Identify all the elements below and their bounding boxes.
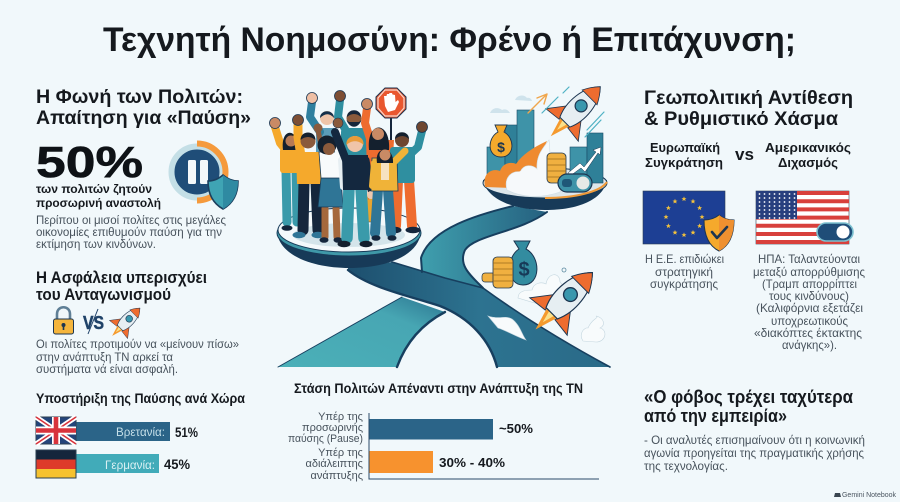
heading: geopolitics: Γεωπολιτική Αντίθεση: [644, 87, 853, 109]
icon: pause donut with shield: [172, 144, 238, 209]
heading: citizens' voice: [36, 86, 251, 129]
quote paragraph: [644, 433, 865, 473]
bar: Britain: Βρετανία:: [116, 425, 165, 439]
right bars: [568, 133, 603, 183]
paragraph: stay behind: [36, 337, 239, 376]
value: continuous: 30% - 40%: [439, 455, 505, 470]
quote paragraph: αγωνία προηγείται της πραγματικής χρήσης: [644, 446, 864, 460]
panel: citizens' voice: [36, 86, 251, 251]
text: EU: συγκράτησης: [650, 277, 718, 291]
panel: support by country: [36, 390, 245, 478]
bar: continuous development: [369, 451, 433, 473]
bar: pause: [369, 419, 493, 440]
subheading: Europe: Συγκράτηση: [645, 155, 723, 170]
bar: Germany: [76, 454, 190, 473]
lower clouds: [488, 275, 605, 342]
illustration: left platform: [277, 208, 421, 268]
vs label: vs: [735, 145, 754, 164]
quote heading: από την εμπειρία»: [644, 406, 787, 426]
paragraph: stay behind: στην ανάπτυξη ΤΝ αρκεί τα: [36, 350, 173, 364]
text: EU: [645, 252, 724, 291]
coins stack: [547, 153, 566, 183]
illustration: acceleration platform: [483, 71, 616, 210]
subheading: Europe: [645, 140, 723, 170]
stat caption: των πολιτών ζητούν: [36, 182, 152, 196]
toggle: [558, 174, 592, 192]
heading: safety: του Ανταγωνισμού: [36, 286, 171, 304]
heading: citizens' voice: Η Φωνή των Πολιτών:: [36, 86, 243, 108]
value: pause: ~50%: [499, 421, 533, 436]
bar: Britain: 51%: [175, 425, 198, 440]
icon: UK flag: [36, 417, 76, 444]
lower rocket: [517, 254, 611, 348]
heading: geopolitics: [644, 87, 853, 130]
person: back bearded: [334, 90, 369, 162]
person: right teal sweater: [388, 122, 428, 233]
axis labels: προσωρινής: [302, 422, 363, 434]
illustration: crowd of citizens: [270, 88, 428, 247]
bar: Germany: Γερμανία:: [105, 458, 155, 472]
panel: attitudes chart: [288, 381, 599, 482]
rocket top: [534, 71, 616, 153]
subheading: America: Αμερικανικός: [765, 140, 851, 155]
paragraph: half of citizens: οικονομίες επιθυμούν παύση για την: [36, 225, 222, 239]
illustration: road: [278, 206, 610, 367]
stat: 50%: 50%: [36, 138, 143, 187]
panel: geopolitics: [643, 87, 865, 352]
lower coins: [482, 257, 513, 288]
subheading: America: Διχασμός: [778, 155, 838, 170]
fire and smoke: [484, 140, 561, 196]
heading: safety: Η Ασφάλεια υπερισχύει: [36, 269, 207, 287]
icon: stop sign with hand: [376, 88, 406, 140]
heading: support by country: Υποστήριξη της Παύσης ανά Χώρα: [36, 390, 245, 406]
subheading: Europe: Ευρωπαϊκή: [650, 140, 720, 155]
panel: quote: [644, 387, 865, 473]
paragraph: half of citizens: εκτίμηση των κινδύνων.: [36, 237, 156, 251]
panel: safety over competition: [36, 269, 239, 376]
watermark: Gemini Notebook: [842, 492, 896, 499]
person: back blue shirt: [306, 92, 338, 158]
person: orange woman: [362, 98, 394, 222]
icon: Germany flag: [36, 450, 76, 478]
heading: citizens' voice: Απαίτηση για «Παύση»: [36, 107, 251, 129]
axis labels: παύσης (Pause): [288, 433, 363, 445]
text: EU: Η Ε.Ε. επιδιώκει: [645, 252, 724, 266]
person: left yellow with teal trousers: [270, 118, 302, 231]
bar: Germany: 45%: [164, 457, 190, 472]
quote heading: [644, 387, 853, 426]
quote paragraph: - Οι αναλυτές επισημαίνουν ότι η κοινωνική: [644, 433, 865, 447]
axis labels: [288, 411, 363, 482]
paragraph: stay behind: συστήματα νά είναι ασφαλή.: [36, 362, 178, 376]
person: orange sweater with navy trousers: [292, 114, 324, 238]
axis labels: Υπέρ της: [318, 411, 363, 423]
title: Τεχνητή Νοημοσύνη: Φρένο ή Επιτάχυνση;: [103, 21, 796, 59]
stat caption: [36, 182, 161, 210]
bowl: [483, 180, 607, 210]
text: USA: υποχρεωτικούς: [771, 314, 848, 328]
icon: money bag: $: [497, 139, 505, 155]
small cloud: [490, 96, 532, 113]
icon: vs: VS: [83, 313, 104, 333]
heading: safety: [36, 269, 207, 304]
text: USA: ανάγκης»).: [782, 338, 837, 352]
person: woman in yellow jacket: [371, 150, 405, 241]
chart bars left: [487, 110, 534, 179]
axis labels: αδιάλειπτης: [306, 458, 363, 470]
quote heading: «Ο φόβος τρέχει ταχύτερα: [644, 387, 853, 407]
text: USA: (Τραμπ απορρίπτει: [762, 277, 857, 291]
person: woman with white top and blue skirt: [314, 118, 343, 243]
quote paragraph: της τεχνολογίας.: [644, 459, 728, 473]
text: USA: «διακόπτες έκτακτης: [754, 326, 862, 340]
paragraph: half of citizens: [36, 213, 226, 251]
text: USA: τους κινδύνους): [769, 289, 849, 303]
icon: EU flag with shield: [643, 191, 734, 251]
lower money bag: $: [518, 259, 530, 281]
text: USA: ΗΠΑ: Ταλαντεύονται: [758, 252, 860, 266]
heading: geopolitics: & Ρυθμιστικό Χάσμα: [644, 108, 838, 130]
axes: [369, 413, 599, 479]
bar: Britain: [76, 422, 198, 441]
person: central man in navy sweater: [335, 132, 375, 247]
stat caption: προσωρινή αναστολή: [36, 196, 161, 210]
icon: padlock: [54, 307, 74, 334]
text: EU: στρατηγική: [655, 265, 713, 279]
icon: rocket: [103, 299, 149, 345]
axis labels: ανάπτυξης: [310, 470, 363, 482]
chart title: Στάση Πολιτών Απέναντι στην Ανάπτυξη της ΤΝ: [294, 381, 583, 396]
icon: US flag with toggle: [756, 191, 853, 244]
illustration: lower money and rocket: [482, 241, 611, 348]
text: USA: [753, 252, 865, 352]
paragraph: stay behind: Οι πολίτες προτιμούν να «μείνουν πίσω»: [36, 337, 239, 351]
axis labels: Υπέρ της: [318, 447, 363, 459]
text: USA: (Καλιφόρνια εξετάζει: [756, 301, 863, 315]
subheading: America: [765, 140, 851, 170]
motion lines: [528, 94, 547, 113]
paragraph: half of citizens: Περίπου οι μισοί πολίτες στις μεγάλες: [36, 213, 226, 227]
text: USA: μεταξύ απορρύθμισης: [753, 265, 865, 279]
